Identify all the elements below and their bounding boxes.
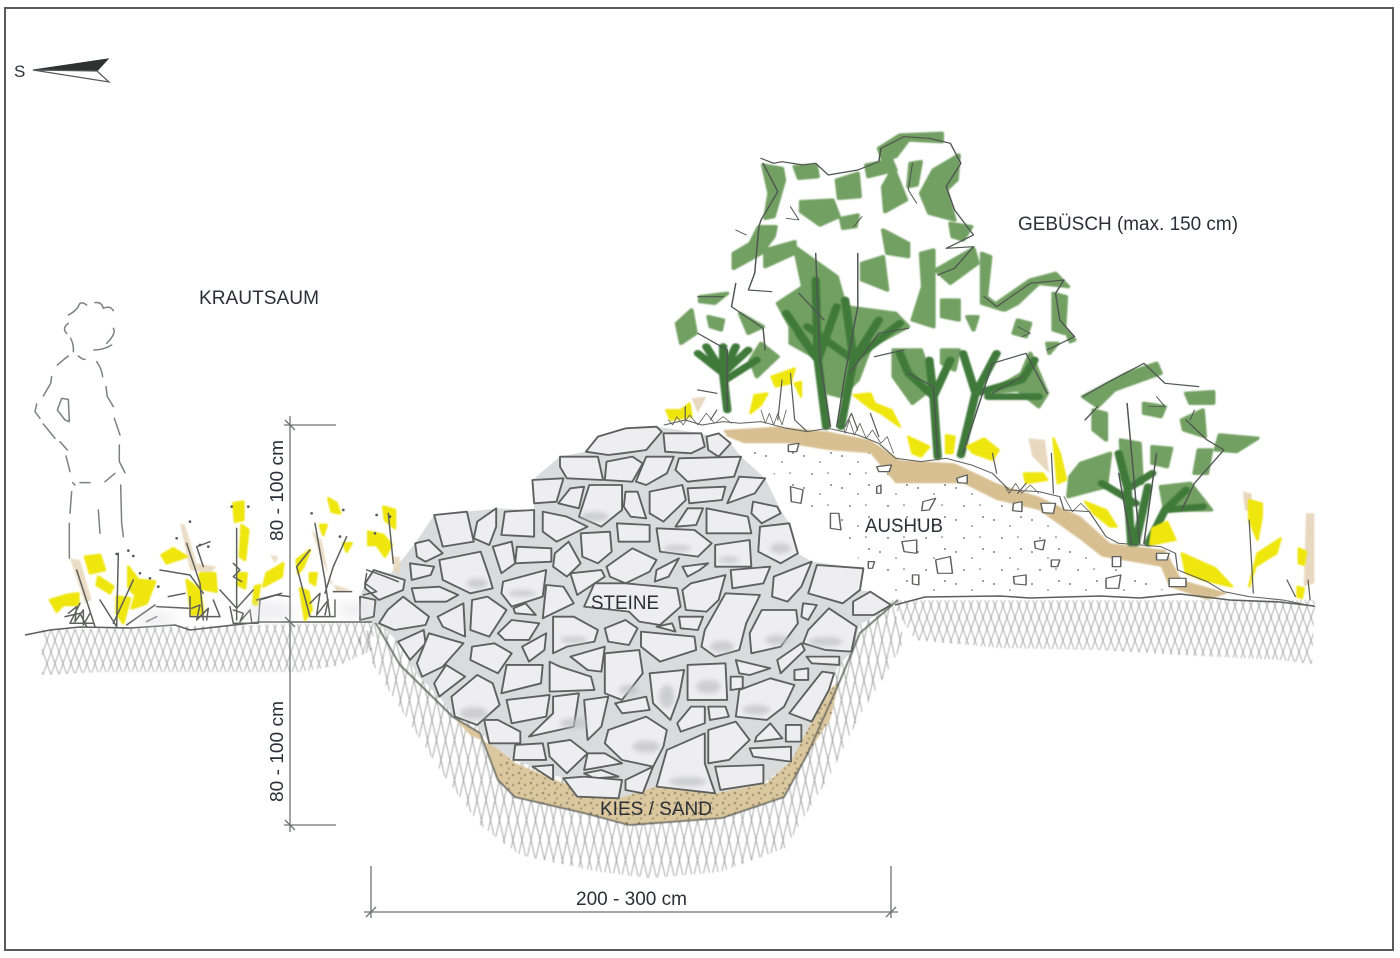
herb strip: KRAUTSAUM plants [50,498,400,627]
material: gravel and sand bed [374,600,898,825]
ground cover: yellow flowers on mound [666,368,1306,598]
plants: beige washes [70,523,400,603]
label: STEINE: STEINE [591,593,659,614]
plants: seed dots [115,505,391,588]
label: KRAUTSAUM: KRAUTSAUM [199,288,319,309]
label: KIES / SAND: KIES / SAND [600,799,712,820]
rubble outlines [788,443,1186,588]
plants: yellow flowers [50,498,395,623]
label: AUSHUB: AUSHUB [865,516,943,537]
pile of stones [360,427,891,798]
label: width: 200 - 300 cm [576,889,687,910]
hatched subsoil [42,600,1315,878]
figure: person for scale [35,303,125,558]
label: S: S [14,62,25,81]
label: upper height: 80 - 100 cm [267,440,287,541]
icon: north arrow pointing to S [33,59,109,82]
shrubs: GEBÜSCH [664,133,1315,607]
label: lower height: 80 - 100 cm [267,701,287,802]
ground cover: beige washes [692,397,1314,587]
label: GEBÜSCH: GEBÜSCH (max. 150 cm) [1018,214,1238,235]
shrubs: dark green leaves and trunks [698,280,1203,543]
plants: dark stems [65,513,398,627]
stones: backing mass [360,427,891,798]
ground surface lines [25,594,1314,635]
shrubs: light green foliage [677,133,1258,510]
dimension: vertical 80-100 cm lines [284,416,336,832]
ground cover: scribbled stems [664,373,1315,607]
stones: grey shading [460,512,843,786]
stones: individual blocks [360,427,891,798]
material: excavated soil mound [723,427,1230,600]
rocks between herbs [135,605,373,624]
dimension: horizontal 200-300 cm lines [364,866,898,918]
shrubs: pen outlines [698,137,1224,543]
topsoil band [723,427,1228,600]
